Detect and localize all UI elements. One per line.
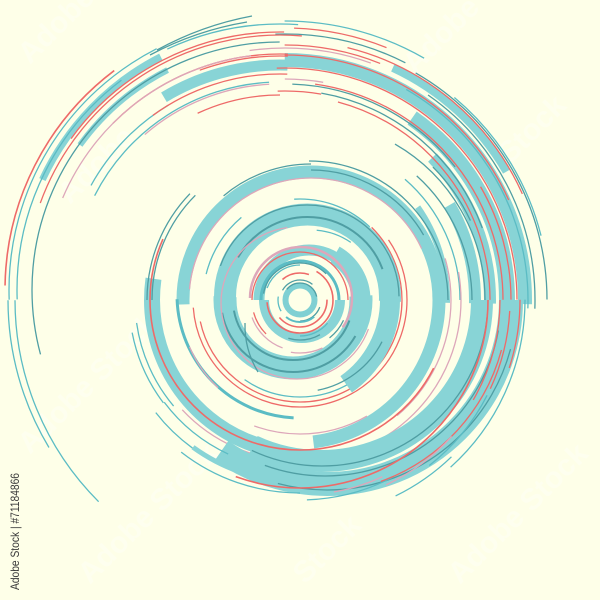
- ring light band: [183, 172, 439, 428]
- central rings: [247, 247, 353, 353]
- watermarks: Stock: [287, 509, 368, 590]
- pink and red rings: [247, 247, 353, 353]
- lower lines: [75, 75, 525, 525]
- lower right spiral band: [75, 75, 525, 525]
- watermarks: Adobe Stock: [12, 307, 165, 460]
- stock id caption: Adobe Stock | #71184866: [8, 473, 22, 590]
- middle spiral ring: radius 130: [170, 161, 448, 439]
- inner spiral ring: radius 80: [184, 197, 399, 403]
- ring light bands: [184, 197, 390, 403]
- outer upper light bands: [18, 28, 542, 556]
- watermarks: Adobe Stock: [72, 437, 225, 590]
- lower light bands: [118, 116, 511, 484]
- ring lines: [170, 161, 448, 439]
- inner teal rings: [278, 278, 322, 322]
- watermarks: Adobe Stock: [442, 437, 595, 590]
- watermarks: Stock: [492, 89, 573, 170]
- ring lines: [208, 205, 399, 392]
- watermarks: Adobe: [52, 121, 141, 210]
- outer upper pink lines: [33, 48, 537, 552]
